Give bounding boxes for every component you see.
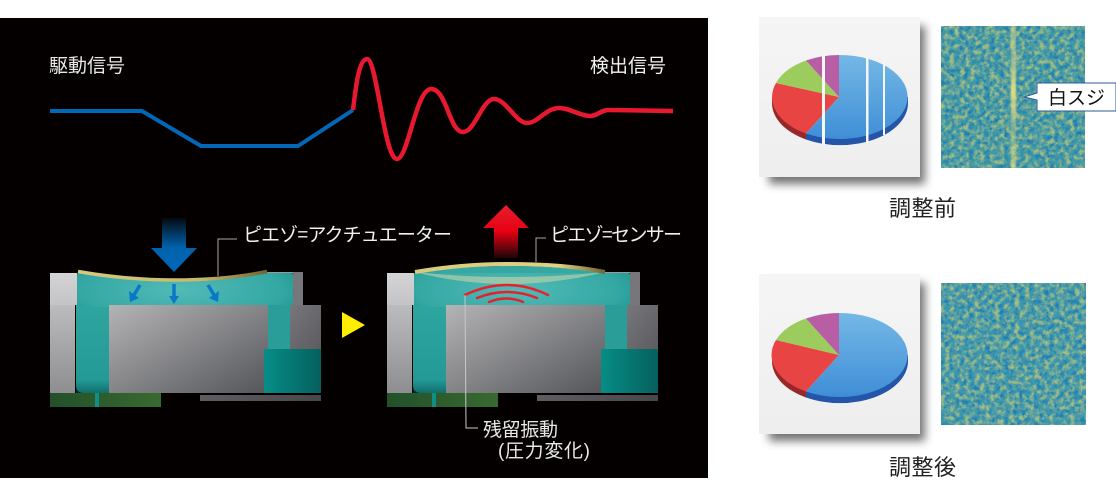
label: piezo actuator: ピエゾ=アクチュエーター bbox=[243, 224, 452, 246]
print card bbox=[759, 274, 920, 434]
noise print sample uniform bbox=[941, 283, 1086, 425]
leader line bbox=[218, 239, 237, 276]
chart: red detection waveform bbox=[353, 59, 673, 159]
caption: before: 調整前 bbox=[889, 196, 956, 221]
noise print sample with streak bbox=[941, 26, 1085, 168]
device body right bbox=[387, 272, 658, 407]
device body left bbox=[50, 272, 321, 407]
card shadow bbox=[769, 283, 925, 441]
label: detection signal: 検出信号 bbox=[590, 55, 666, 77]
card shadow bbox=[769, 26, 925, 184]
print card bbox=[759, 17, 920, 177]
yellow process arrow bbox=[342, 312, 365, 338]
pie chart clean bbox=[772, 313, 908, 403]
panel: piezo signal diagram bbox=[0, 18, 708, 478]
panel: after adjustment bbox=[759, 274, 1086, 480]
chart: blue drive waveform bbox=[50, 110, 353, 146]
small blue pressure arrows bbox=[129, 284, 219, 304]
teal dome under plate bbox=[415, 266, 605, 273]
callout: white streak: 白スジ bbox=[1048, 87, 1105, 109]
lower pale lens bbox=[415, 272, 605, 284]
panel: before adjustment bbox=[759, 17, 1116, 221]
label: residual vibration: 残留振動 bbox=[483, 419, 558, 441]
piezo plate bent upward bbox=[415, 264, 605, 272]
piezo plate bent downward bbox=[78, 272, 267, 280]
pie chart with white streaks bbox=[772, 55, 908, 145]
big red arrow bbox=[483, 205, 529, 258]
label: drive signal: 駆動信号 bbox=[49, 55, 125, 77]
black gap above the bent plate bbox=[78, 268, 267, 280]
callout: white streak bbox=[1024, 83, 1116, 111]
caption: after: 調整後 bbox=[889, 455, 956, 480]
leader line sensor bbox=[536, 238, 546, 262]
label: pressure change: (圧力変化) bbox=[498, 440, 590, 462]
red residual vibration arcs bbox=[465, 285, 548, 302]
diagram: piezo as actuator bbox=[50, 218, 452, 407]
diagram: piezo as sensor bbox=[387, 205, 682, 462]
label: piezo sensor: ピエゾ=センサー bbox=[550, 224, 682, 246]
big blue arrow bbox=[151, 218, 197, 272]
leader line vibration bbox=[465, 295, 478, 428]
